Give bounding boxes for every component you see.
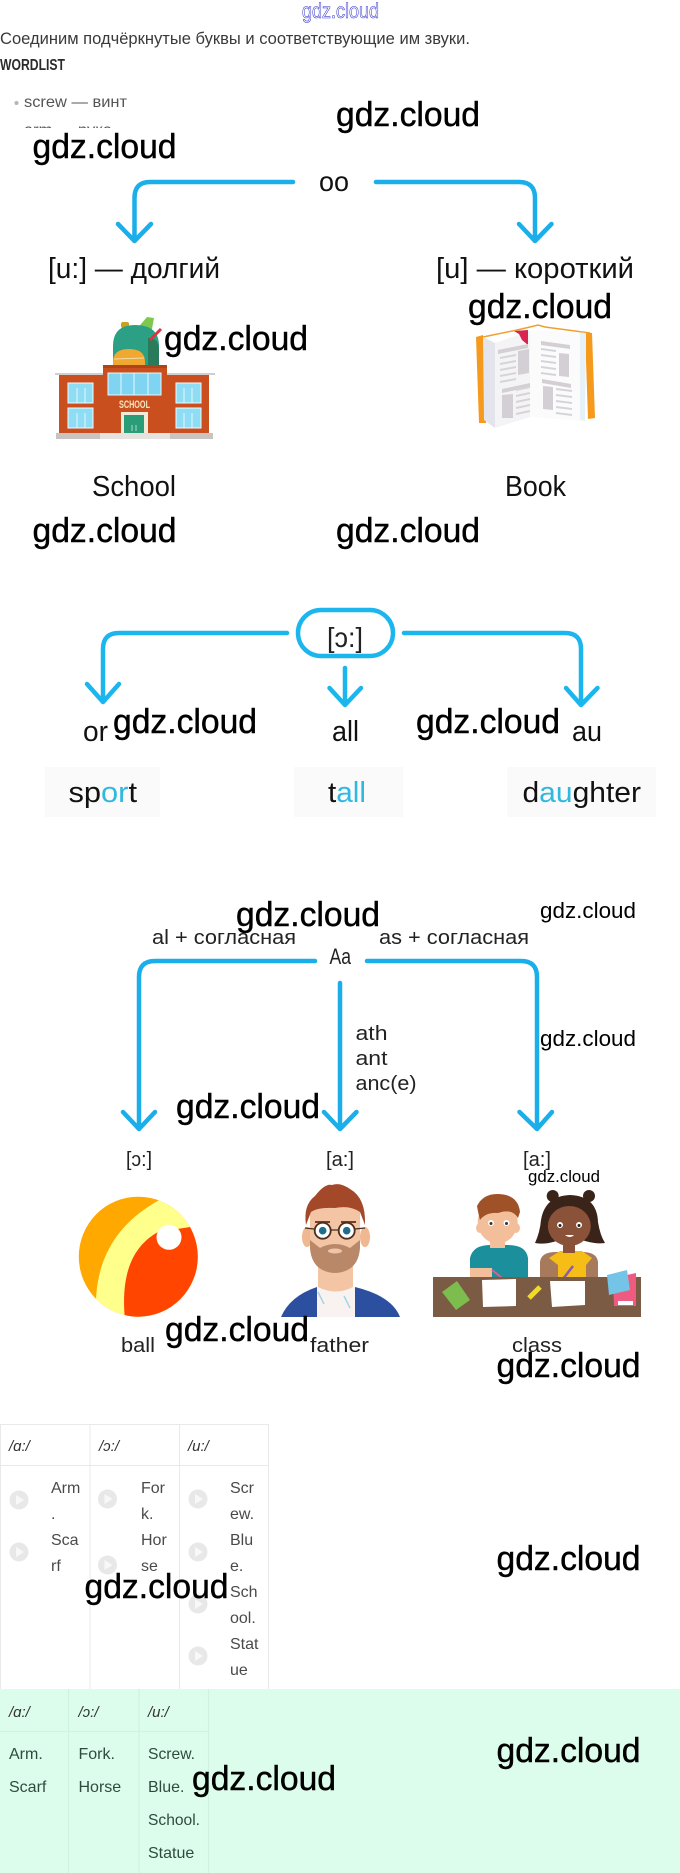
answer header: /u:/ bbox=[147, 1704, 171, 1721]
watermark: gdz.cloud bbox=[496, 1540, 640, 1578]
label: or: or bbox=[83, 716, 108, 748]
diagram: letter Aa bbox=[79, 927, 641, 1357]
watermark: gdz.cloud bbox=[164, 320, 308, 358]
word: School: School bbox=[92, 471, 176, 503]
column 3 audio words bbox=[188, 1480, 259, 1679]
column 3 audio words: ew. bbox=[230, 1506, 254, 1523]
table header bbox=[8, 1438, 211, 1455]
site link logo: gdz.cloud bbox=[302, 0, 379, 23]
word: class: class bbox=[512, 1335, 562, 1357]
table header: /ɑ:/ bbox=[8, 1438, 32, 1455]
column 3 audio words: ue bbox=[230, 1662, 248, 1679]
watermark: gdz.cloud bbox=[496, 1347, 640, 1385]
column 1 audio words: rf bbox=[51, 1558, 61, 1575]
answer column 3: Screw. bbox=[148, 1746, 195, 1763]
watermark small: gdz.cloud bbox=[528, 1168, 600, 1186]
watermark: gdz.cloud bbox=[468, 288, 612, 326]
wordlist fragment: screw — винт bbox=[24, 94, 128, 111]
answer column 3: Statue bbox=[148, 1845, 194, 1862]
column 3 audio words: Stat bbox=[230, 1636, 259, 1653]
watermark: gdz.cloud bbox=[496, 1732, 640, 1770]
column 3 audio words: e. bbox=[230, 1558, 243, 1575]
arrow: oo to long u bbox=[118, 182, 293, 241]
watermark: gdz.cloud bbox=[165, 1311, 309, 1349]
word card: tall: tall bbox=[328, 777, 366, 809]
answer column 3: School. bbox=[148, 1812, 200, 1829]
answer column 1: Scarf bbox=[9, 1779, 47, 1796]
column 3 audio words: ool. bbox=[230, 1610, 256, 1627]
watermark: gdz.cloud bbox=[32, 128, 176, 166]
word card: daughter: daughter bbox=[522, 777, 641, 809]
answer column 2: Fork. bbox=[78, 1746, 115, 1763]
column 1 audio words bbox=[10, 1480, 80, 1575]
word: ball: ball bbox=[121, 1335, 155, 1357]
answer header bbox=[8, 1704, 171, 1721]
word card: sport: sport bbox=[68, 777, 137, 809]
column 2 audio words: k. bbox=[141, 1506, 153, 1523]
icon: ball bbox=[78, 1196, 198, 1317]
letter combinations: anc(e) bbox=[356, 1073, 416, 1095]
letters oo: oo bbox=[319, 166, 349, 197]
sound pill: [ɔ:] bbox=[327, 622, 363, 653]
column 3 audio words: Sch bbox=[230, 1584, 258, 1601]
icon: children at desk bbox=[433, 1190, 641, 1317]
word card: tall bbox=[294, 767, 403, 817]
column 3 audio words: Scr bbox=[230, 1480, 255, 1497]
letter combinations: ant bbox=[356, 1048, 388, 1070]
arrow: to or bbox=[87, 633, 287, 702]
watermark: gdz.cloud bbox=[236, 896, 380, 934]
wordlist fragment bbox=[14, 98, 127, 128]
sound: open o: [ɔ:] bbox=[126, 1149, 152, 1171]
answer header: /ɑ:/ bbox=[8, 1704, 32, 1721]
arrow: oo to short u bbox=[376, 182, 552, 241]
column 1 audio words: Sca bbox=[51, 1532, 79, 1549]
long u label: [u:] — долгий bbox=[48, 253, 220, 285]
arrow: to class sound bbox=[367, 961, 552, 1129]
arrow: to au bbox=[404, 633, 598, 705]
answer header: /ɔ:/ bbox=[78, 1704, 100, 1721]
word card: sport bbox=[45, 767, 160, 817]
icon: school bbox=[55, 317, 215, 439]
letter combinations bbox=[356, 1023, 416, 1095]
sound: long a centre: [a:] bbox=[326, 1149, 354, 1171]
table header: /u:/ bbox=[187, 1438, 211, 1455]
answer column 1 bbox=[9, 1746, 47, 1796]
column 2 audio words bbox=[98, 1480, 167, 1575]
arrow: to all bbox=[330, 668, 361, 705]
answer column 2 bbox=[78, 1746, 121, 1796]
sound: long a right: [a:] bbox=[523, 1149, 551, 1171]
word: Book: Book bbox=[505, 471, 566, 503]
word: father: father bbox=[310, 1335, 369, 1357]
task instruction: Соединим подчёркнутые буквы и соответствующие им звуки. bbox=[0, 30, 470, 48]
column 2 audio words: Hor bbox=[141, 1532, 167, 1549]
rule: al + consonant: al + согласная bbox=[152, 927, 296, 949]
wordlist fragment: arm — рука bbox=[24, 122, 112, 139]
arrow: to ball sound bbox=[123, 961, 315, 1129]
diagram: open o sound bbox=[45, 610, 656, 817]
icon: open book bbox=[476, 325, 595, 428]
word card: daughter bbox=[507, 767, 656, 817]
sound pill bbox=[298, 610, 393, 656]
answer column 1: Arm. bbox=[9, 1746, 43, 1763]
answer column 3 bbox=[148, 1746, 200, 1862]
watermark: gdz.cloud bbox=[84, 1568, 228, 1606]
answer column 2: Horse bbox=[78, 1779, 121, 1796]
diagram: oo bbox=[48, 166, 634, 503]
wordlist heading: WORDLIST bbox=[0, 57, 65, 74]
watermark: gdz.cloud bbox=[113, 703, 257, 741]
column 2 audio words: se bbox=[141, 1558, 158, 1575]
column 1 audio words: . bbox=[51, 1506, 55, 1523]
table header: /ɔ:/ bbox=[98, 1438, 121, 1455]
panel: answer bbox=[0, 1689, 680, 1873]
watermark: gdz.cloud bbox=[32, 512, 176, 550]
watermark: gdz.cloud bbox=[416, 703, 560, 741]
arrow: to father sound bbox=[324, 983, 356, 1129]
short u label: [u] — короткий bbox=[436, 253, 634, 285]
label: all: all bbox=[332, 716, 359, 748]
label: au: au bbox=[572, 716, 602, 748]
letter combinations: ath bbox=[356, 1023, 388, 1045]
answer column 3: Blue. bbox=[148, 1779, 184, 1796]
column 2 audio words: For bbox=[141, 1480, 166, 1497]
column 3 audio words: Blu bbox=[230, 1532, 253, 1549]
icon: school: SCHOOL bbox=[119, 399, 150, 411]
watermark small: gdz.cloud bbox=[540, 1026, 636, 1051]
watermark: gdz.cloud bbox=[336, 96, 480, 134]
watermark small: gdz.cloud bbox=[540, 898, 636, 923]
table: words with audio bbox=[0, 1424, 269, 1689]
column 1 audio words: Arm bbox=[51, 1480, 80, 1497]
watermark: gdz.cloud bbox=[176, 1088, 320, 1126]
icon: father bbox=[281, 1184, 400, 1317]
rule: as + consonant: as + согласная bbox=[379, 927, 529, 949]
watermark: gdz.cloud bbox=[192, 1760, 336, 1798]
letters Aa: Aa bbox=[330, 944, 352, 969]
watermark: gdz.cloud bbox=[336, 512, 480, 550]
